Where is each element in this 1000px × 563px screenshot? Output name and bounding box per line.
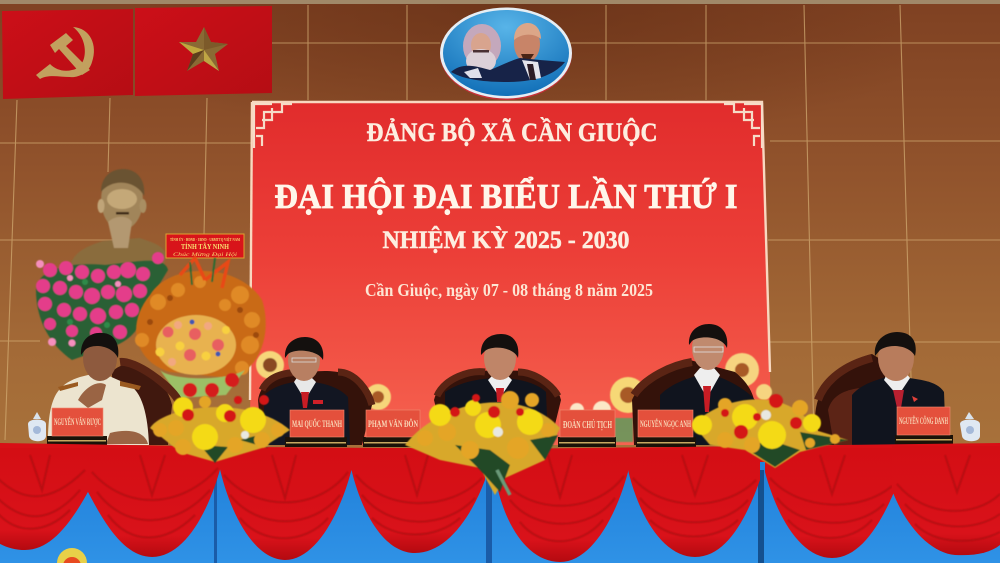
heading: party committee: ĐẢNG BỘ XÃ CẦN GIUỘC bbox=[366, 118, 658, 147]
portrait: Marx bbox=[463, 24, 501, 73]
name plate: Đoàn Chủ Tịch bbox=[558, 410, 616, 447]
red drapery swags bbox=[0, 443, 1000, 562]
orange and mixed flower arrangement bbox=[135, 258, 266, 398]
name plate: Nguyễn Công Danh bbox=[895, 407, 953, 444]
swag 6 bbox=[628, 450, 760, 557]
delegate: Nguyễn Ngọc Anh bbox=[660, 324, 755, 445]
name plate: Nguyễn Văn Rược: NGUYỄN VĂN RƯỢC bbox=[54, 417, 101, 427]
congratulation sign: Tỉnh Tây Ninh bbox=[166, 234, 244, 258]
name plate: Mai Quốc Thanh bbox=[285, 410, 347, 447]
tea cup right bbox=[960, 412, 980, 441]
name plate: Phạm Văn Đôn: PHẠM VĂN ĐÔN bbox=[368, 419, 418, 429]
Ho Chi Minh bronze bust bbox=[69, 169, 166, 280]
name plate: Nguyễn Ngọc Anh: NGUYỄN NGỌC ANH bbox=[640, 419, 691, 429]
delegate: Mai Quốc Thanh bbox=[264, 337, 350, 445]
text: place and date: Cần Giuộc, ngày 07 - 08 tháng 8 năm 2025 bbox=[365, 280, 653, 300]
oval portrait of Marx and Lenin bbox=[440, 8, 572, 100]
icon: hammer and sickle bbox=[36, 27, 94, 79]
corner ornament right bbox=[724, 104, 762, 148]
swag 3 bbox=[219, 448, 352, 560]
tea cup left bbox=[28, 412, 46, 441]
chair 1 bbox=[112, 362, 178, 445]
flag panel: gold star bbox=[135, 6, 272, 96]
blue table skirt bbox=[0, 450, 1000, 563]
chair 3 bbox=[434, 371, 561, 445]
party flag panel: hammer and sickle bbox=[2, 9, 133, 99]
name plate: Nguyễn Công Danh: NGUYỄN CÔNG DANH bbox=[899, 416, 948, 426]
sunflowers on screen bbox=[256, 351, 772, 442]
corner ornament left bbox=[254, 104, 292, 148]
delegate: chair presiding bbox=[445, 334, 548, 445]
delegate: officer in uniform bbox=[48, 333, 149, 445]
name plate: Nguyễn Văn Rược bbox=[47, 408, 107, 445]
icon: star bbox=[179, 27, 228, 71]
table bouquet center bbox=[405, 391, 560, 495]
name plate: Nguyễn Ngọc Anh bbox=[636, 410, 696, 447]
chair 4 bbox=[632, 360, 754, 445]
swag 8 bbox=[892, 446, 1000, 555]
congratulation sign: Tỉnh Tây Ninh: Chúc Mừng Đại Hội bbox=[173, 253, 238, 258]
name plate: Phạm Văn Đôn bbox=[363, 410, 423, 447]
emblem on skirt bbox=[57, 548, 87, 563]
swag 1 bbox=[0, 448, 89, 550]
heading: congress title: ĐẠI HỘI ĐẠI BIỂU LẦN THỨ I bbox=[274, 176, 738, 216]
heading: term: NHIỆM KỲ 2025 - 2030 bbox=[382, 226, 630, 254]
chair 2 bbox=[258, 371, 372, 445]
name plate: Mai Quốc Thanh: MAI QUỐC THANH bbox=[292, 419, 342, 429]
swag 2 bbox=[87, 448, 222, 557]
name plate: Đoàn Chủ Tịch: ĐOÀN CHỦ TỊCH bbox=[563, 419, 612, 431]
swag 5 bbox=[498, 450, 628, 562]
congratulation sign: Tỉnh Tây Ninh: TỈNH ỦY - HĐND - UBND - UBMTTQ VIỆT NAM bbox=[170, 237, 241, 242]
table bouquet left bbox=[150, 395, 290, 463]
LED backdrop screen bbox=[250, 101, 771, 445]
pink flower arrangement bbox=[36, 252, 168, 360]
portrait: Lenin bbox=[451, 23, 565, 82]
swag 4 bbox=[351, 448, 485, 553]
chair 5 bbox=[815, 354, 885, 445]
table bouquet right bbox=[692, 394, 848, 468]
delegate: Nguyễn Công Danh bbox=[852, 332, 946, 445]
congratulation sign: Tỉnh Tây Ninh: TỈNH TÂY NINH bbox=[181, 243, 229, 251]
swag 7 bbox=[765, 448, 895, 558]
